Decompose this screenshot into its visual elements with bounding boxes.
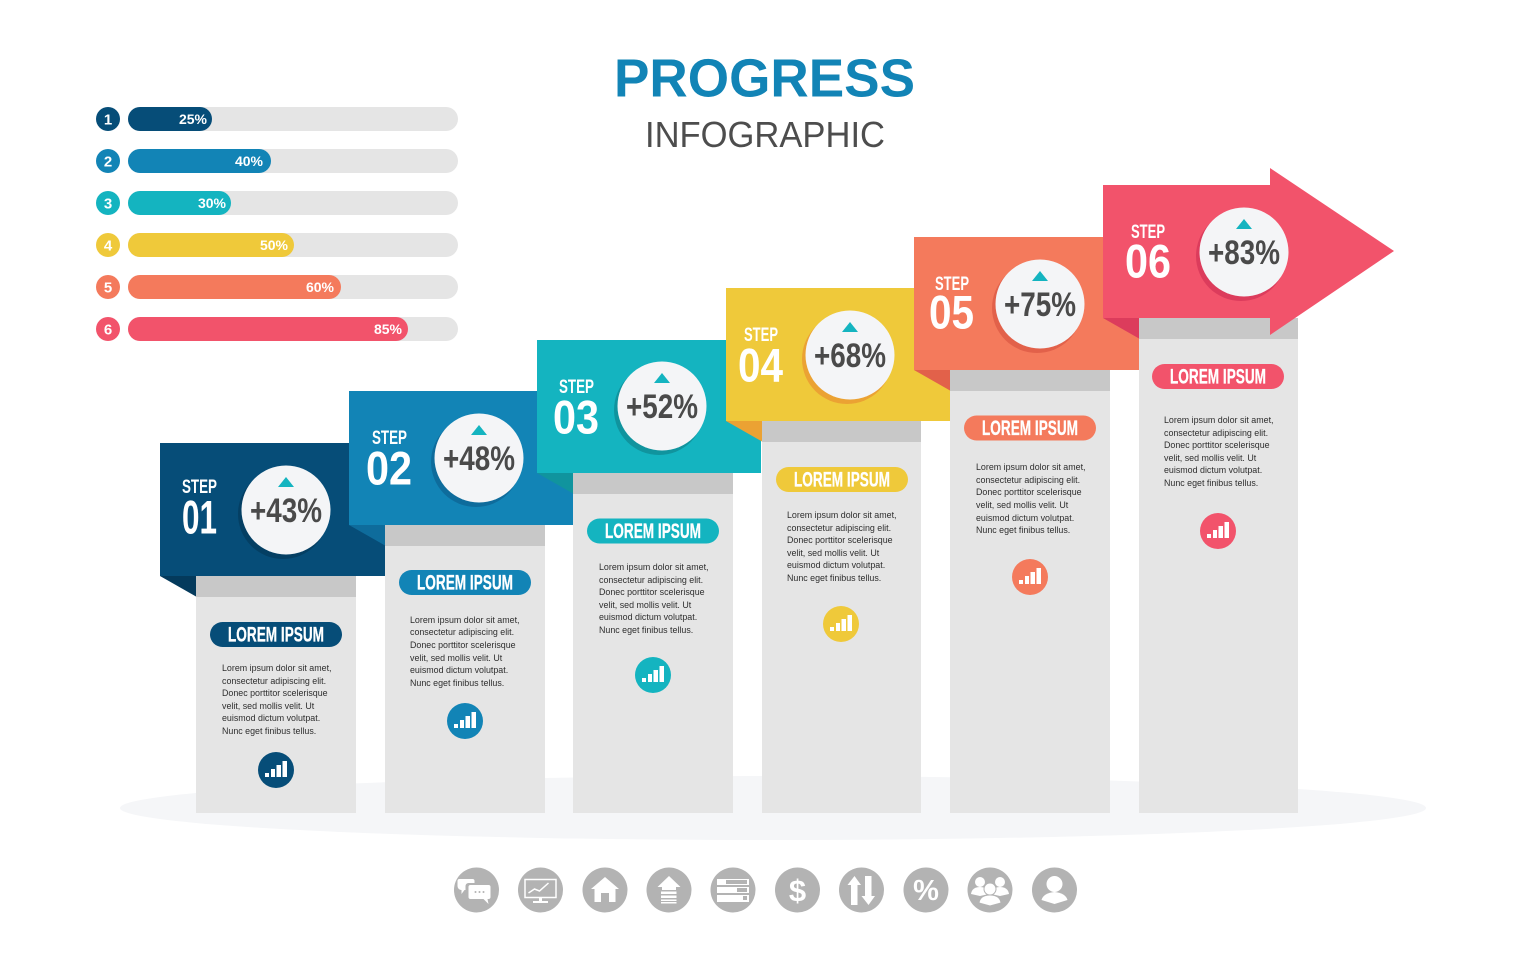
step 4: velit, sed mollis velit. Ut — [787, 548, 880, 558]
bar 1: 25% — [96, 107, 458, 131]
step 3: velit, sed mollis velit. Ut — [599, 600, 692, 610]
bar 2: 40%: 40% — [235, 153, 264, 169]
step 6: euismod dictum volutpat. — [1164, 465, 1262, 475]
bar 1: 25%: 1 — [104, 112, 112, 128]
icon: house — [582, 868, 628, 912]
icon: percent — [904, 868, 948, 912]
step 6: +83% — [1208, 234, 1280, 272]
step 6: STEP — [1131, 221, 1165, 243]
step 5 — [914, 237, 1139, 813]
title: PROGRESS — [614, 48, 915, 108]
step 6: 06 — [1125, 234, 1171, 288]
arrow banner — [1103, 168, 1394, 335]
icon: chat bubbles — [454, 868, 499, 912]
icon: dollar — [775, 868, 820, 912]
bar 4: 50%: 4 — [104, 238, 113, 254]
bar 6: 85%: 85% — [374, 321, 403, 337]
step 1: velit, sed mollis velit. Ut — [222, 701, 315, 711]
step 1 — [160, 443, 385, 813]
step 4 — [726, 288, 950, 813]
bar 4: 50%: 50% — [260, 237, 289, 253]
bar 2: 40% — [96, 149, 458, 173]
step 1: Nunc eget finibus tellus. — [222, 726, 316, 736]
icon: up and down arrows — [839, 868, 884, 912]
bar 5: 60%: 60% — [306, 279, 335, 295]
icon row — [454, 868, 1077, 912]
icon: person — [1032, 868, 1077, 912]
icon: dollar: $ — [789, 873, 806, 908]
bar 3: 30% — [96, 191, 458, 215]
step 2: 02 — [366, 442, 412, 494]
step 1: LOREM IPSUM — [228, 624, 324, 646]
title: INFOGRAPHIC — [645, 114, 885, 155]
step 6: Donec porttitor scelerisque — [1164, 440, 1270, 450]
step 1: STEP — [182, 476, 217, 498]
step 3: euismod dictum volutpat. — [599, 612, 697, 622]
bar 2: 40%: 2 — [104, 154, 112, 170]
step 5: 05 — [929, 286, 974, 338]
step 3: Donec porttitor scelerisque — [599, 587, 705, 597]
step 5: Donec porttitor scelerisque — [976, 487, 1082, 497]
step 3: LOREM IPSUM — [605, 520, 701, 543]
step 5: STEP — [935, 273, 969, 295]
step 3: 03 — [553, 390, 599, 444]
step 4: Lorem ipsum dolor sit amet, — [787, 510, 896, 520]
step 6: consectetur adipiscing elit. — [1164, 428, 1268, 438]
step 3: Lorem ipsum dolor sit amet, — [599, 562, 708, 572]
step 6 — [1103, 168, 1394, 813]
step 1: Lorem ipsum dolor sit amet, — [222, 663, 332, 673]
step 1: euismod dictum volutpat. — [222, 713, 320, 723]
step 6: Lorem ipsum dolor sit amet, — [1164, 415, 1274, 425]
ground shadow — [120, 776, 1426, 840]
step 6: velit, sed mollis velit. Ut — [1164, 453, 1257, 463]
bar 3: 30%: 30% — [198, 195, 227, 211]
icon: monitor chart — [518, 868, 563, 912]
step 4: 04 — [738, 338, 783, 392]
icon: group of people — [968, 868, 1012, 912]
step 6: Nunc eget finibus tellus. — [1164, 478, 1258, 488]
step 2: Lorem ipsum dolor sit amet, — [410, 615, 520, 625]
step 2: Nunc eget finibus tellus. — [410, 678, 504, 688]
step 5: LOREM IPSUM — [982, 417, 1078, 440]
step 2 — [349, 391, 573, 813]
step 4: LOREM IPSUM — [794, 468, 890, 492]
step 2: velit, sed mollis velit. Ut — [410, 653, 503, 663]
step 4: euismod dictum volutpat. — [787, 560, 885, 570]
step 2: STEP — [372, 427, 407, 449]
bar 1: 25%: 25% — [179, 111, 208, 127]
step 2: consectetur adipiscing elit. — [410, 627, 514, 637]
step 4: Nunc eget finibus tellus. — [787, 573, 881, 583]
step 4: Donec porttitor scelerisque — [787, 535, 893, 545]
step 2: euismod dictum volutpat. — [410, 665, 508, 675]
step 5: euismod dictum volutpat. — [976, 513, 1074, 523]
step 1: consectetur adipiscing elit. — [222, 676, 326, 686]
title — [614, 48, 915, 155]
step 5: Lorem ipsum dolor sit amet, — [976, 462, 1086, 472]
icon: up arrow with stripes — [646, 868, 692, 912]
step 1: +43% — [250, 492, 322, 530]
bar 5: 60%: 5 — [104, 280, 112, 296]
step 5: Nunc eget finibus tellus. — [976, 525, 1070, 535]
step 2: +48% — [443, 440, 515, 478]
step 5: velit, sed mollis velit. Ut — [976, 500, 1069, 510]
step 3: consectetur adipiscing elit. — [599, 575, 703, 585]
step 2: Donec porttitor scelerisque — [410, 640, 516, 650]
icon: server stack — [710, 868, 756, 912]
step 5: consectetur adipiscing elit. — [976, 475, 1080, 485]
step 3: +52% — [626, 388, 698, 426]
step 1: Donec porttitor scelerisque — [222, 688, 328, 698]
step 4: +68% — [814, 337, 886, 375]
progress bar list — [96, 107, 458, 341]
step 4: STEP — [744, 324, 778, 346]
step 5: +75% — [1004, 286, 1076, 324]
bar 3: 30%: 3 — [104, 196, 112, 212]
icon: percent: % — [913, 875, 939, 907]
bar 4: 50% — [96, 233, 458, 257]
step 4: consectetur adipiscing elit. — [787, 523, 891, 533]
step 2: LOREM IPSUM — [417, 572, 513, 594]
bar 6: 85%: 6 — [104, 322, 112, 338]
step 6: LOREM IPSUM — [1170, 366, 1266, 388]
step 3: Nunc eget finibus tellus. — [599, 625, 693, 635]
bar 6: 85% — [96, 317, 458, 341]
bar 5: 60% — [96, 275, 458, 299]
step 3: STEP — [559, 376, 594, 398]
step 1: 01 — [182, 490, 217, 544]
step 3 — [537, 340, 761, 813]
